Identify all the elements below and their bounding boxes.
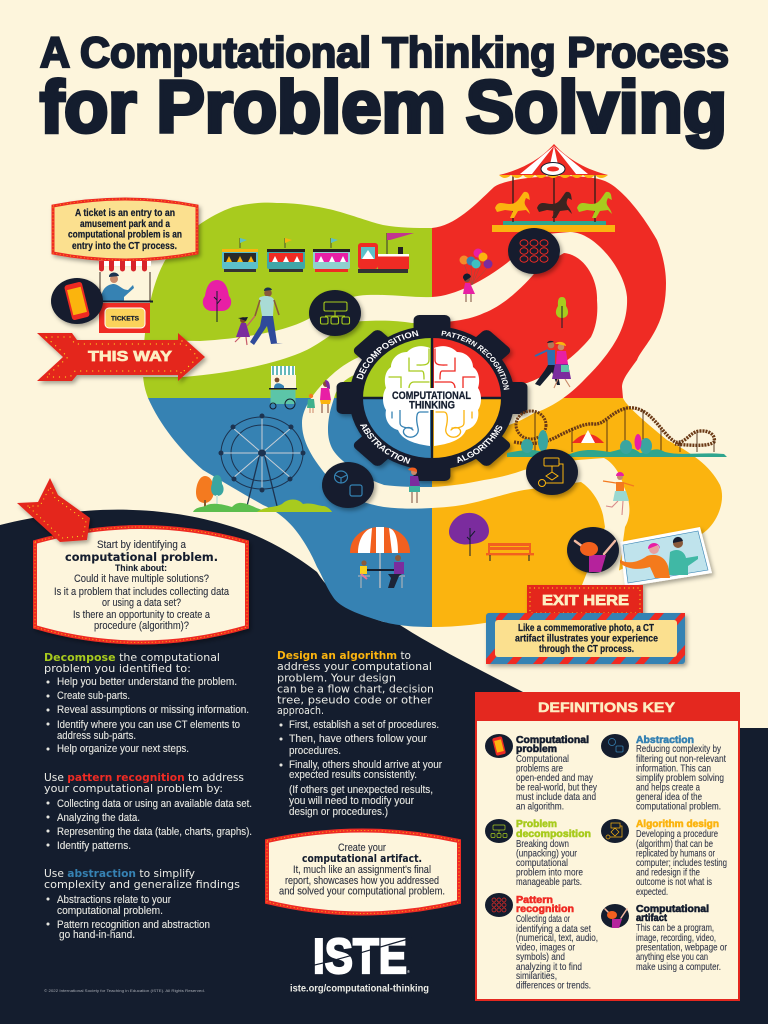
orange tree (196, 476, 214, 507)
exit here sign (527, 585, 643, 616)
text block: design an algorithm (277, 649, 442, 818)
definition: algorithm design: expected. (636, 887, 668, 898)
navy background panel (0, 510, 768, 1024)
definition: algorithm design: computer; includes testing (636, 858, 727, 869)
artifact text: report, showcases how you addressed (285, 875, 439, 887)
brain (383, 346, 481, 448)
definition: algorithm design: replicated by humans or (636, 848, 715, 860)
center label (392, 390, 471, 412)
start arrow (17, 478, 90, 542)
artifact frame (267, 830, 459, 914)
definition: pattern recognition: differences or trends. (516, 980, 591, 992)
dancing woman (603, 472, 634, 515)
definition: abstraction: and helps create a (636, 782, 700, 794)
abstraction bullets: Abstractions relate to your (57, 894, 171, 906)
striped frame (486, 613, 685, 664)
commemorative photo (620, 527, 712, 587)
algorithm bullets (280, 719, 442, 818)
definition: problem decomposition: Breaking down (516, 839, 569, 850)
algorithm heading (277, 649, 434, 717)
panel: start computational problem (17, 478, 247, 642)
decompose heading: Decompose the computational (44, 651, 220, 664)
decompose bullets: address sub-parts. (57, 730, 136, 742)
definition: algorithm design: (algorithm) that can be (636, 839, 713, 850)
definition: algorithm design: outcome is not what is (636, 877, 712, 888)
train car 3 (313, 238, 350, 272)
icon: ticket badge (51, 278, 103, 324)
blue abstraction zone (148, 398, 432, 627)
text block: abstraction (44, 867, 240, 941)
title (40, 29, 729, 148)
definition: problem decomposition: manageable parts. (516, 877, 582, 888)
decompose bullets: Create sub-parts. (57, 690, 130, 702)
definition: computational problem (485, 734, 597, 812)
carousel (492, 144, 615, 232)
algorithm heading: tree, pseudo code or other (277, 694, 432, 706)
title: for Problem Solving (40, 67, 727, 148)
umbrella table scene (350, 527, 410, 588)
gear labels: PATTERN RECOGNITION (441, 330, 510, 390)
pattern heading (44, 771, 244, 795)
definition: pattern recognition: identifying a data set (516, 924, 591, 935)
definition: abstraction: filtering out non-relevant (636, 754, 726, 765)
definition: abstraction: simplify problem solving (636, 773, 724, 784)
carousel roof (499, 144, 608, 175)
carousel poles (513, 175, 595, 222)
copyright: © 2022 International Society for Teaching in Education (ISTE). All Rights Reserved. (44, 988, 205, 993)
text block: decompose (44, 651, 249, 755)
decompose heading (44, 651, 220, 675)
train car 2 (267, 238, 305, 272)
ticket sign text: computational problem is an (68, 230, 182, 240)
gear: computational thinking wheel (336, 314, 532, 486)
pattern heading: Use pattern recognition to address (44, 771, 244, 784)
algorithm heading: can be a flow chart, decision (277, 682, 434, 696)
algorithm heading: address your computational (277, 660, 432, 673)
definition: pattern recognition: similarities, (516, 971, 557, 982)
exit callout text (515, 623, 658, 655)
algorithm heading: approach. (277, 704, 324, 717)
algorithm bullets: design or procedures.) (289, 806, 388, 818)
definition: computational problem: Computational (516, 754, 569, 765)
algorithm heading: Design an algorithm to (277, 649, 411, 662)
pink tree (203, 280, 231, 322)
start panel text: or using a data set? (102, 597, 181, 609)
definition: computational problem: problem (516, 743, 557, 755)
start panel text: Could it have multiple solutions? (74, 573, 209, 585)
start panel frame (35, 527, 247, 642)
definitions heading: DEFINITIONS KEY (538, 699, 676, 715)
definition: problem decomposition: problem into more (516, 868, 583, 878)
definition: abstraction: general idea of the (636, 792, 702, 803)
definition: algorithm design: and redesign if the (636, 868, 700, 878)
definition: abstraction: computational problem. (636, 802, 721, 812)
definition: computational artifact: make using a computer. (636, 962, 721, 973)
abstraction heading: complexity and generalize findings (44, 878, 240, 891)
pattern bullets: Identify patterns. (57, 840, 131, 852)
definition: computational problem: problems are (516, 764, 563, 774)
bushes under wheel (193, 500, 332, 512)
people: man and child (235, 287, 283, 345)
text block: pattern recognition (44, 771, 252, 852)
gear labels: ALGORITHMS (457, 425, 502, 464)
icon: pattern recognition badge (508, 228, 560, 274)
center label: COMPUTATIONAL (392, 390, 471, 402)
carousel horses (495, 192, 530, 218)
artifact text (279, 842, 445, 898)
winding path upper (140, 232, 627, 435)
icon: abstraction badge (322, 462, 374, 508)
purple tree (449, 513, 489, 556)
artifact text: It, much like an assignment's final (293, 864, 431, 876)
decompose bullets: Help organize your next steps. (57, 743, 189, 755)
definition: problem decomposition: Problem (516, 818, 557, 830)
decompose bullets (46, 676, 249, 755)
girl walking (408, 468, 420, 503)
definition: problem decomposition: (unpacking) your (516, 848, 578, 860)
definition: computational artifact: presentation, webpage or (636, 942, 728, 954)
exit callout text: through the CT process. (539, 644, 634, 655)
definition: computational artifact: artifact (636, 912, 667, 924)
start panel text (54, 539, 230, 632)
definition: problem decomposition: decomposition (516, 828, 591, 840)
definition: pattern recognition: symbols) and (516, 952, 565, 963)
panel: create computational artifact (267, 830, 459, 914)
definition: computational problem: an algorithm. (516, 802, 564, 812)
definition: problem decomposition: computational (516, 858, 568, 869)
algorithm bullets: First, establish a set of procedures. (289, 719, 439, 731)
tickets label: TICKETS (111, 316, 139, 322)
start panel text: Is it a problem that includes collecting data (54, 586, 230, 598)
website url: iste.org/computational-thinking (290, 984, 429, 994)
definition: computational artifact (601, 903, 728, 973)
panel: definitions key (475, 692, 740, 1000)
arrow shape (37, 333, 205, 381)
green decomposition zone (143, 203, 432, 398)
definition: abstraction: Reducing complexity by (636, 744, 721, 755)
icon: algorithm badge (526, 449, 578, 495)
train engine (358, 233, 414, 273)
definition: pattern recognition: analyzing it to find (516, 962, 582, 973)
people: mother and child (307, 380, 331, 413)
algorithm bullets: procedures. (289, 745, 341, 757)
definition: algorithm design (601, 818, 727, 898)
arrow label: THIS WAY (88, 348, 172, 365)
definition: abstraction: information. This can (636, 764, 711, 774)
bench (486, 543, 534, 561)
definition: pattern recognition: Collecting data or (516, 914, 570, 925)
definition: computational problem: be real-world, but they (516, 782, 597, 794)
abstraction heading (44, 867, 240, 891)
icon: decomposition badge (309, 290, 361, 336)
definition: computational artifact: Computational (636, 903, 709, 915)
start panel text: computational problem. (65, 550, 218, 564)
gear labels: DECOMPOSITION (356, 330, 418, 380)
exit callout text: Like a commemorative photo, a CT (518, 623, 654, 634)
definition: pattern recognition: recognition (516, 903, 574, 915)
artifact text: Create your (338, 842, 386, 854)
amusement park map (140, 176, 722, 627)
exit label: EXIT HERE (542, 592, 629, 609)
gear labels (356, 330, 510, 464)
abstraction heading: Use abstraction to simplify (44, 867, 195, 880)
pattern bullets: Analyzing the data. (57, 812, 140, 824)
pattern heading: your computational problem by: (44, 782, 223, 795)
algorithm bullets: you will need to modify your (289, 795, 414, 807)
start panel text: Is there an opportunity to create a (73, 609, 211, 621)
yellow algorithm zone (432, 398, 722, 627)
panel: ticket callout (53, 199, 197, 260)
ticket sign text (68, 208, 182, 252)
definition: computational problem: Computational (516, 734, 589, 746)
winding path lower (302, 352, 629, 590)
definition: abstraction: Abstraction (636, 734, 694, 746)
decompose heading: problem you identified to: (44, 662, 191, 675)
definition: problem decomposition (485, 818, 591, 888)
train car 1 (222, 238, 258, 272)
definition: computational artifact: image, recording, video, (636, 933, 716, 944)
abstraction bullets (46, 894, 210, 941)
couple walking (535, 341, 571, 388)
ticket sign text: amusement park and a (80, 219, 170, 230)
algorithm heading: problem. Your design (277, 672, 396, 684)
food cart (269, 366, 297, 409)
abstraction bullets: go hand-in-hand. (59, 929, 135, 941)
abstraction bullets: Pattern recognition and abstraction (57, 919, 210, 931)
definition: computational artifact: anything else you can (636, 952, 708, 963)
algorithm bullets: Finally, others should arrive at your (289, 759, 442, 771)
pattern bullets: Collecting data or using an available data set. (57, 798, 252, 810)
panel: exit callout (486, 613, 685, 664)
girl with balloons (460, 248, 492, 302)
gear quadrants (363, 338, 501, 458)
teal tree (211, 475, 224, 507)
ticket seller (101, 272, 134, 301)
exit callout text: artifact illustrates your experience (515, 634, 658, 644)
carousel base (492, 225, 615, 232)
center label: THINKING (409, 400, 455, 412)
definition: computational problem: must include data and (516, 792, 596, 803)
awning (99, 261, 151, 272)
decompose bullets: Help you better understand the problem. (57, 676, 237, 688)
park trees (196, 280, 568, 561)
algorithm bullets: expected results consistently. (289, 769, 417, 781)
start panel text: procedure (algorithm)? (94, 620, 189, 632)
start panel text: Think about: (115, 563, 167, 574)
algorithm bullets: Then, have others follow your (289, 733, 427, 745)
ticket sign (53, 199, 197, 260)
lime tree (556, 297, 568, 328)
definition: pattern recognition: Pattern (516, 894, 553, 906)
definition: computational problem: open-ended and may (516, 773, 593, 784)
artifact text: and solved your computational problem. (279, 886, 445, 898)
train (222, 233, 414, 273)
red pattern recognition zone (432, 176, 666, 398)
title: A Computational Thinking Process (40, 29, 729, 77)
icon: artifact badge (567, 527, 619, 573)
logo: ISTE: ISTE (313, 930, 407, 984)
definition: pattern recognition (485, 893, 598, 992)
definition: abstraction (601, 734, 726, 812)
ticket stand (99, 261, 153, 333)
algorithm bullets: (If others get unexpected results, (289, 784, 433, 796)
start panel text: Start by identifying a (97, 539, 187, 551)
artifact text: computational artifact. (302, 853, 422, 865)
ticket booth (99, 303, 150, 333)
definition: computational artifact: This can be a program, (636, 923, 714, 934)
pattern bullets (46, 798, 252, 852)
abstraction bullets: computational problem. (57, 905, 163, 917)
definitions header (475, 692, 740, 721)
this way arrow sign (37, 333, 205, 381)
ferris wheel (218, 414, 306, 506)
definition: algorithm design: Developing a procedure (636, 829, 718, 840)
definition: algorithm design: Algorithm design (636, 818, 719, 830)
gear labels: ABSTRACTION (360, 424, 410, 464)
decompose bullets: Reveal assumptions or missing information. (57, 704, 249, 716)
decompose bullets: Identify where you can use CT elements to (57, 719, 240, 731)
pattern bullets: Representing the data (table, charts, graphs). (57, 826, 252, 838)
definition: pattern recognition: video, images or (516, 942, 576, 954)
definitions box (476, 693, 739, 1000)
definition: pattern recognition: (numerical, text, audio, (516, 933, 598, 944)
ticket sign text: A ticket is an entry to an (75, 208, 175, 219)
roller coaster (507, 408, 727, 457)
logo: ISTE: ® (407, 969, 410, 974)
ticket sign text: entry into the CT process. (72, 241, 177, 252)
gear body and teeth (337, 315, 527, 481)
